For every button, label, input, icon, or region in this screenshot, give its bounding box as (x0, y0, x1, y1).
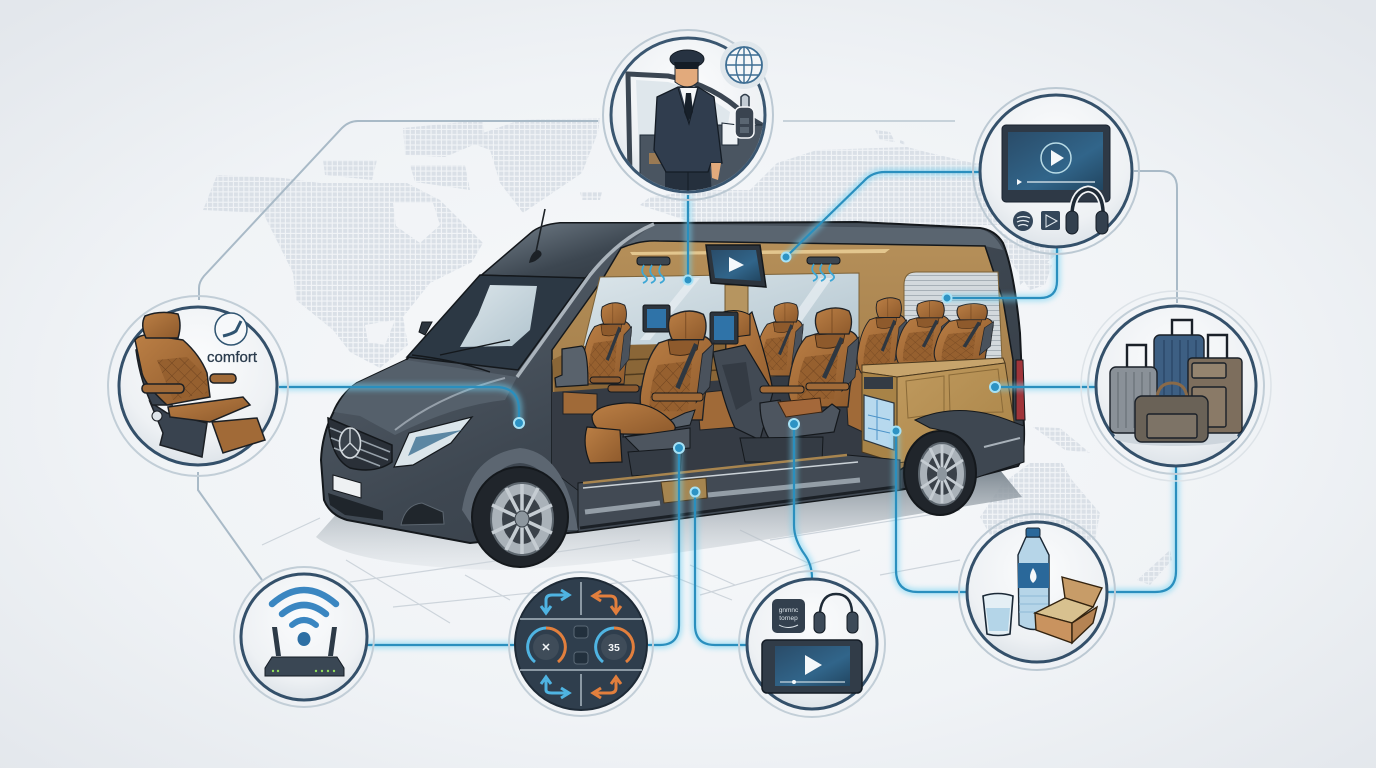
dotted world map (203, 118, 1172, 585)
side step and sill (578, 455, 900, 532)
grille (328, 418, 392, 470)
left climate dial (528, 628, 565, 662)
tail light (1016, 360, 1025, 420)
rear armrests (590, 377, 639, 392)
icon: handheld screen (762, 640, 862, 693)
rear body sill (915, 410, 1024, 478)
icon: blue airflow arrow lower (541, 677, 569, 698)
roof (482, 223, 654, 278)
blue connector glow (279, 172, 1176, 645)
back cushions behind seats (563, 368, 880, 440)
icon: orange airflow arrow (593, 591, 621, 613)
panel: climate control (509, 572, 653, 716)
icon: wifi signal (272, 590, 336, 646)
air vent right (807, 257, 840, 281)
panel: comfort seat (108, 296, 288, 476)
blue connector lines (279, 172, 1176, 645)
panel: wifi (234, 567, 374, 707)
icon: chauffeur figure (654, 50, 722, 195)
seat-back screen rear (643, 305, 670, 332)
icon: snack box (1035, 577, 1102, 643)
left climate dial: ✕ (541, 642, 551, 654)
climate buttons (574, 626, 588, 664)
ceiling monitor (706, 245, 766, 287)
antenna (529, 209, 545, 263)
air vent left (637, 257, 670, 283)
icon: water bottle (1018, 528, 1049, 630)
panel: entertainment display (973, 88, 1139, 254)
floor perspective lines (262, 510, 960, 623)
interior opening (552, 241, 1013, 490)
van ground shadow (316, 470, 1022, 570)
icon: recliner seat (135, 312, 265, 457)
roof band (621, 224, 1003, 250)
panel: media and audio (739, 571, 885, 717)
lower grille (328, 493, 383, 520)
centre column (725, 285, 748, 315)
van body (321, 222, 1024, 543)
van (321, 209, 1025, 567)
icon: glass of water (983, 594, 1013, 636)
right climate dial: 35 (608, 642, 620, 654)
panel: chauffeur (603, 30, 773, 200)
connector anchor dots (514, 252, 1000, 496)
icon: streaming badge: tornep (779, 615, 798, 622)
icon: tablet with play button (1002, 125, 1110, 202)
icon: streaming badge (772, 599, 805, 633)
panel: drinks and snacks (959, 514, 1115, 670)
interior lower wall (552, 340, 880, 400)
windshield (407, 275, 585, 370)
front-facing middle seat (740, 308, 859, 462)
side mirror stub (419, 322, 432, 335)
chauffeur panel ring (611, 38, 765, 192)
roller door (904, 272, 1002, 360)
headlight (394, 417, 472, 467)
cargo unit with fridge (862, 358, 1014, 463)
exterior mirror (555, 346, 588, 387)
icon: headphones (1066, 189, 1108, 234)
front wheel (472, 467, 568, 567)
middle row seat reverse (710, 311, 773, 440)
icon: suitcases (1110, 320, 1242, 446)
cabin floor (552, 370, 900, 490)
hood (334, 360, 517, 435)
icon: headphones (814, 594, 858, 633)
ceiling light strip (630, 249, 890, 255)
fog lamp (401, 503, 444, 525)
licence plate (333, 475, 361, 498)
front passenger seat (585, 311, 714, 476)
rear passenger seats (582, 298, 994, 384)
icon: orange airflow arrow lower (593, 677, 621, 698)
icon: streaming badge: gnmnc (779, 607, 799, 614)
icon: key fob (735, 94, 754, 138)
icon: router (265, 627, 344, 676)
rear wheel (904, 431, 976, 515)
comfort label: comfort (207, 349, 258, 366)
front wheel arch (462, 448, 578, 530)
side window (580, 273, 859, 360)
right climate dial (596, 628, 633, 662)
icon: open vehicle door (628, 74, 770, 195)
icon: globe (720, 41, 768, 89)
windshield glare (460, 285, 537, 347)
grey connector lines (198, 121, 1177, 580)
icon: blue airflow arrow (541, 590, 569, 613)
a-pillar (517, 224, 654, 377)
icon: streaming badges (1013, 211, 1060, 231)
icon: comfort badge (215, 313, 247, 345)
wipers (412, 340, 510, 372)
panel: luggage (1081, 291, 1271, 481)
